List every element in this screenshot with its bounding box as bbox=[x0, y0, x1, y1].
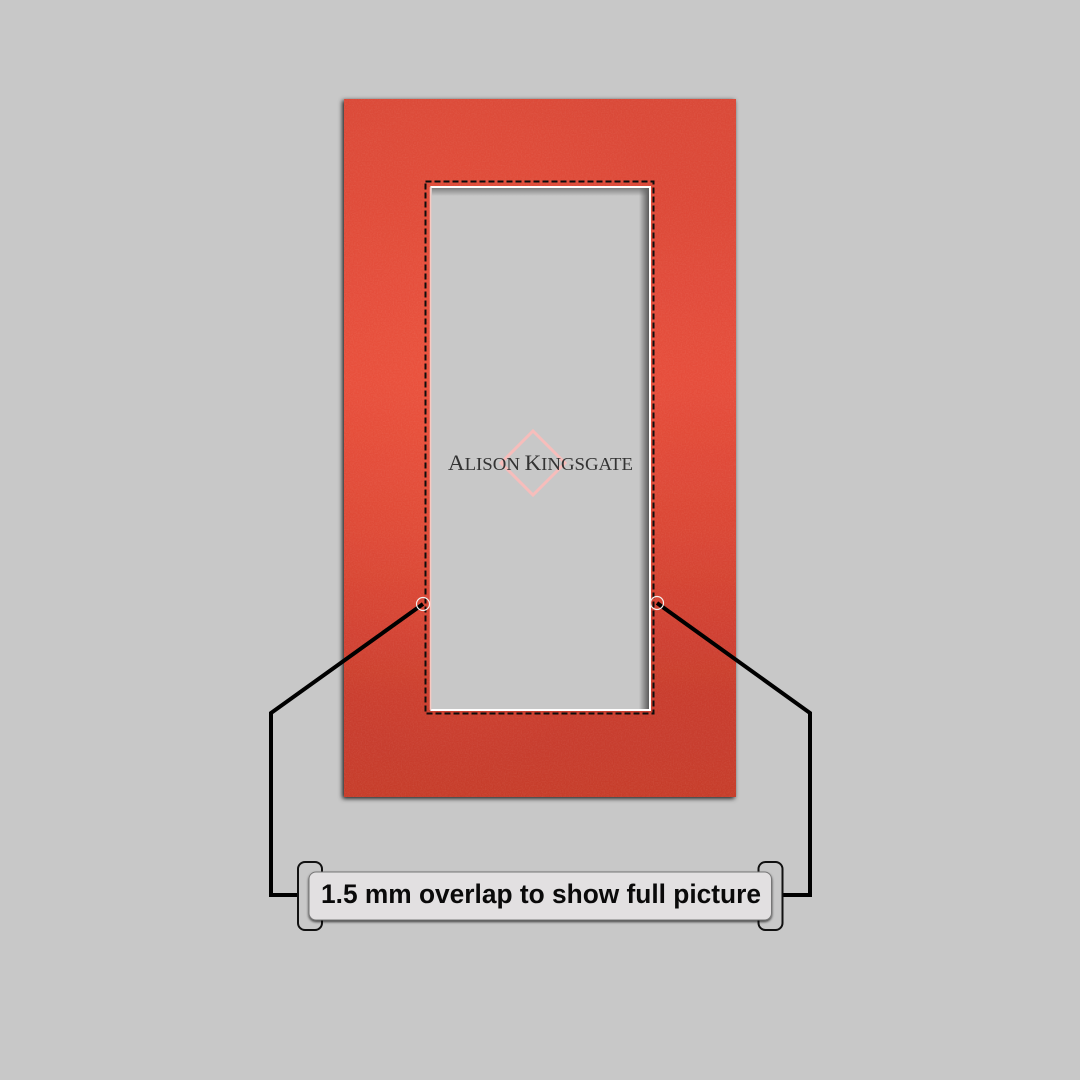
window left pale edge bbox=[430, 187, 432, 710]
window opening bbox=[430, 186, 651, 711]
left leader line bbox=[271, 604, 423, 895]
mat board bbox=[344, 99, 736, 797]
logo wordmark: ALISON KINGSGATE bbox=[448, 450, 633, 475]
left callout arrow bbox=[271, 598, 430, 895]
infographic canvas bbox=[269, 96, 812, 931]
window white edge bbox=[431, 187, 650, 710]
mat board glow and texture bbox=[344, 99, 736, 797]
window inner shadow right bbox=[639, 188, 649, 709]
logo: Alison Kingsgate bbox=[448, 431, 633, 495]
callout label bbox=[298, 862, 782, 930]
label box bbox=[309, 872, 772, 920]
logo diamond bbox=[501, 431, 565, 495]
label text: 1.5 mm overlap to show full picture bbox=[321, 879, 761, 909]
panel: red mat board with window bbox=[344, 99, 736, 797]
right target circle bbox=[650, 596, 664, 610]
left target circle bbox=[416, 598, 430, 610]
right bracket tab bbox=[758, 862, 782, 930]
right callout arrow bbox=[650, 596, 810, 895]
left bracket tab bbox=[298, 862, 322, 930]
dashed overlap outline bbox=[426, 182, 654, 714]
right leader line bbox=[657, 603, 810, 895]
window inner shadow top bbox=[432, 188, 649, 196]
